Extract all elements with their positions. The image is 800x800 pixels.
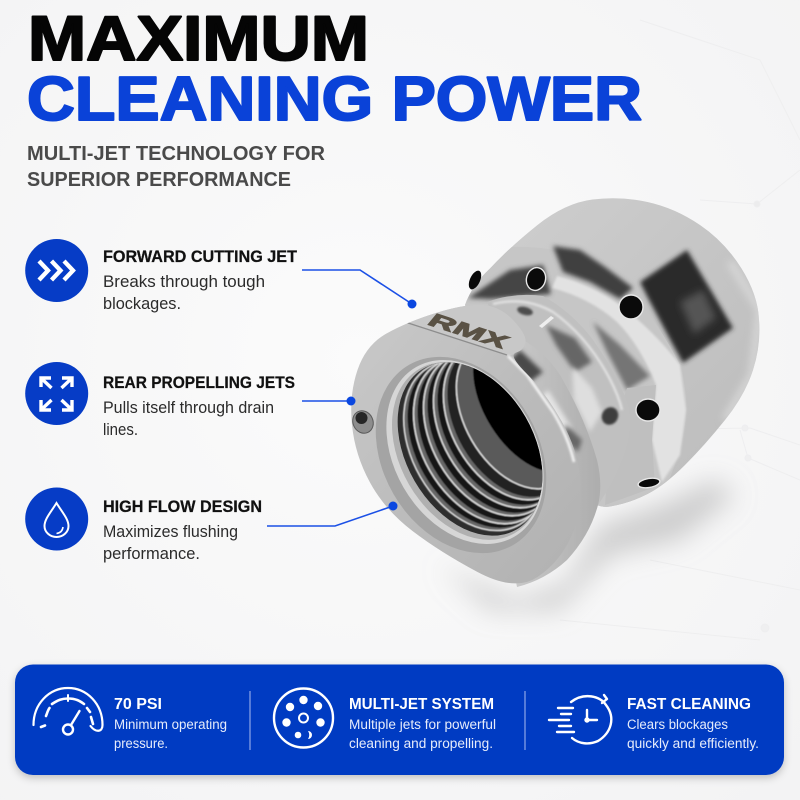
- product photo: drain jetter nozzle: [340, 190, 770, 595]
- heading: MULTI-JET SYSTEM: [349, 696, 494, 713]
- subtitle: SUPERIOR PERFORMANCE: [27, 168, 291, 191]
- description: Clears blockages: [627, 717, 728, 732]
- rear jet hole: [349, 407, 377, 437]
- front face: [351, 306, 576, 584]
- callout dots: [346, 300, 416, 510]
- stamped flat with logo: [405, 303, 527, 356]
- product shadow: [440, 480, 735, 610]
- icon: expanding arrows: [25, 362, 88, 425]
- spec: fast cleaning: [549, 695, 759, 751]
- spec: 70 psi: pressure.: [114, 736, 168, 751]
- threaded bore: [376, 357, 546, 553]
- feature: high flow design: performance.: [103, 544, 200, 563]
- feature: rear propelling jets: lines.: [103, 420, 138, 439]
- heading: REAR PROPELLING JETS: [103, 373, 295, 392]
- dark reflection: [640, 250, 733, 363]
- heading: FAST CLEANING: [627, 696, 751, 713]
- stamped flat with logo: RMX: [423, 310, 513, 353]
- title line: maximum: MAXIMUM: [28, 4, 369, 74]
- thread rings: [402, 362, 542, 532]
- divider: [250, 691, 525, 750]
- callout lines: [267, 270, 412, 526]
- description: Multiple jets for powerful: [349, 717, 496, 732]
- heading: 70 PSI: [114, 696, 162, 713]
- feature: forward cutting jet: blockages.: [103, 294, 181, 313]
- jet ring band: [465, 247, 678, 507]
- icon: stopwatch with speed lines: [549, 695, 611, 743]
- title: [27, 4, 642, 134]
- subtitle: MULTI-JET TECHNOLOGY FOR: [27, 142, 325, 165]
- heading: FORWARD CUTTING JET: [103, 247, 298, 266]
- icon: jet disc: [274, 688, 333, 748]
- icon: water drop: [25, 488, 88, 550]
- spec: multi-jet system: cleaning and propelling.: [349, 736, 493, 751]
- feature: forward cutting jet: [25, 239, 298, 313]
- icon: triple chevron: [25, 239, 88, 302]
- decorative network pattern: [560, 20, 800, 640]
- neck disc: [487, 295, 630, 505]
- feature: high flow design: [25, 488, 262, 563]
- subtitle: [27, 142, 325, 191]
- description: Maximizes flushing: [103, 522, 238, 541]
- inner hole: [472, 368, 542, 471]
- spec: 70 psi: [34, 688, 227, 751]
- bore chamfer: [341, 326, 581, 584]
- description: Breaks through tough: [103, 272, 265, 291]
- side jet holes: [466, 265, 661, 489]
- description: Minimum operating: [114, 717, 227, 732]
- description: Pulls itself through drain: [103, 398, 274, 417]
- spec: multi-jet system: [274, 688, 496, 751]
- flange barrel: [500, 340, 600, 587]
- dome body: [465, 198, 760, 507]
- spec: fast cleaning: quickly and efficiently.: [627, 736, 759, 751]
- icon: pressure gauge: [34, 688, 102, 734]
- panel: bottom specs banner: [15, 664, 784, 775]
- title line: cleaning power: CLEANING POWER: [27, 65, 642, 134]
- heading: HIGH FLOW DESIGN: [103, 497, 262, 516]
- feature: rear propelling jets: [25, 362, 295, 439]
